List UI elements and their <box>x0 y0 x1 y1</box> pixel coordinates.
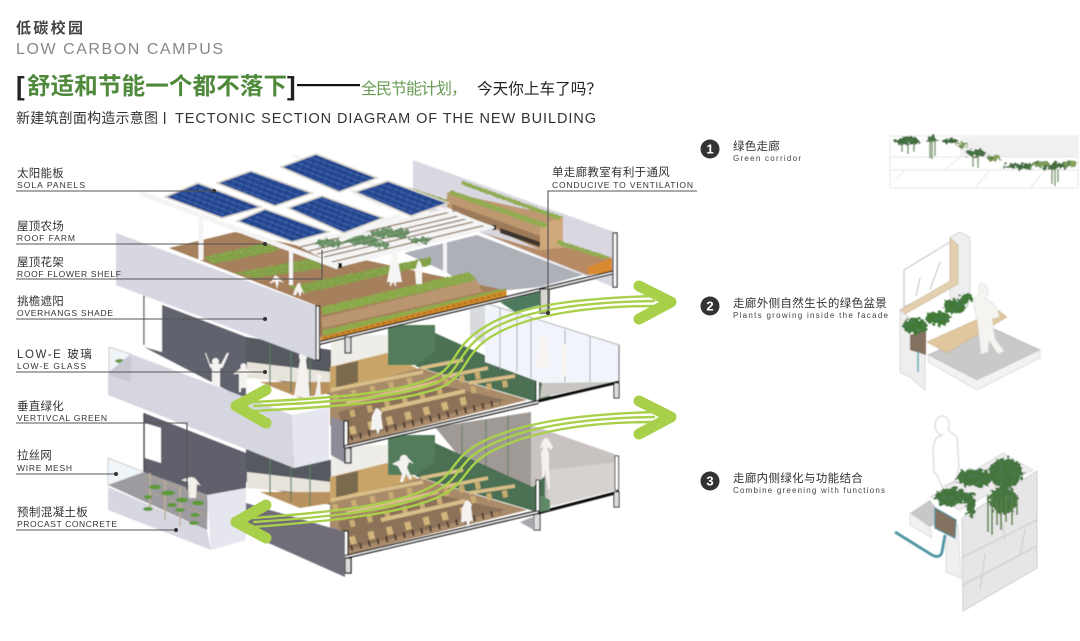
callout: solar panels <box>16 166 216 193</box>
mid balcony parapet <box>108 354 329 468</box>
callout: conducive to ventilation: 单走廊教室有利于通风 <box>552 165 670 179</box>
illustration: inner planter with seat <box>895 416 1037 611</box>
item 3: combine greening with functions <box>700 471 885 495</box>
lower dark wall <box>246 503 345 577</box>
callout: overhangs shade: OVERHANGS SHADE <box>17 308 113 318</box>
ventilation arrow: upper floor <box>236 286 671 423</box>
item 3: combine greening with functions: 3 <box>706 474 714 488</box>
roof floor slab section <box>319 233 617 353</box>
subheading: tectonic section diagram <box>16 110 596 127</box>
roof paving <box>404 235 583 293</box>
headline: comfort and energy saving: [ <box>16 71 25 101</box>
callout: conducive to ventilation: CONDUCIVE TO VENTILATION <box>552 180 693 190</box>
roof wood planter right <box>403 181 612 275</box>
callout: vertical green: VERTIVCAL GREEN <box>17 413 107 423</box>
illustration: outer planter with bench <box>900 232 1040 390</box>
item 2: plants growing inside the facade: Plants growing inside the facade <box>733 311 889 320</box>
callout: wire mesh <box>16 448 118 476</box>
callout: roof flower shelf <box>16 250 322 279</box>
lower balcony with wire mesh and planting <box>108 458 246 550</box>
callout: wire mesh: 拉丝网 <box>17 448 52 462</box>
callout: vertical green <box>16 399 187 490</box>
title: low carbon campus: 低碳校园 <box>16 19 83 37</box>
item 1: green corridor: 绿色走廊 <box>733 139 780 153</box>
roof back wall <box>413 160 617 287</box>
headline: comfort and energy saving: 全民节能计划， <box>361 80 467 98</box>
item 3: combine greening with functions: 走廊内侧绿化与功能结合 <box>733 471 863 485</box>
item 2: plants growing inside the facade: 走廊外侧自然生长的绿色盆景 <box>733 296 887 310</box>
callout: low-e glass: LOW-E GLASS <box>17 361 86 371</box>
callout: conducive to ventilation <box>546 165 697 315</box>
callout: vertical green: 垂直绿化 <box>17 399 64 413</box>
overhang wall <box>116 233 320 360</box>
callout: roof flower shelf: ROOF FLOWER SHELF <box>17 269 121 279</box>
upper floor slab and classroom <box>246 325 550 463</box>
item 3: combine greening with functions: Combine greening with functions <box>733 486 885 495</box>
roof figures <box>269 250 423 297</box>
callout: precast concrete <box>16 505 178 532</box>
ventilation arrow: lower floor <box>236 401 671 538</box>
panel support frame <box>140 155 494 285</box>
upper right corridor with glazing <box>470 300 619 401</box>
illustration: green corridor strip <box>890 136 1078 188</box>
callout: solar panels: 太阳能板 <box>17 166 64 180</box>
people on mid balcony <box>205 350 322 398</box>
item 1: green corridor <box>700 139 801 163</box>
item 1: green corridor: 1 <box>706 142 714 156</box>
callout: precast concrete: PROCAST CONCRETE <box>17 519 117 529</box>
lower classroom <box>246 435 550 573</box>
callout: overhangs shade <box>16 294 267 321</box>
subheading: tectonic section diagram: 新建筑剖面构造示意图 <box>16 110 158 126</box>
running figure and child <box>371 407 475 527</box>
title: low carbon campus <box>16 19 223 58</box>
subheading: tectonic section diagram: TECTONIC SECTION DIAGRAM OF THE NEW BUILDING <box>175 111 596 127</box>
headline: comfort and energy saving <box>16 71 602 101</box>
callout: precast concrete: 预制混凝土板 <box>17 505 88 519</box>
callout: roof flower shelf: 屋顶花架 <box>17 256 64 269</box>
trellis and vines <box>292 208 496 268</box>
item 2: plants growing inside the facade <box>700 296 889 320</box>
callout: low-e glass <box>16 347 267 374</box>
headline: comfort and energy saving: 今天你上车了吗？ <box>477 80 602 98</box>
mid parapet and rear wall <box>109 295 246 400</box>
lower rear wall and window <box>144 413 246 510</box>
callout: low-e glass: LOW-E 玻璃 <box>17 347 92 361</box>
headline: comfort and energy saving: 舒适和节能一个都不落下 <box>27 73 287 99</box>
callout: roof farm: ROOF FARM <box>17 233 75 243</box>
person: lower corridor <box>540 438 553 489</box>
callout: wire mesh: WIRE MESH <box>17 463 72 473</box>
item 1: green corridor: Green corridor <box>733 154 801 163</box>
title: low carbon campus: LOW CARBON CAMPUS <box>16 41 223 58</box>
roof wooden planters left <box>169 232 507 341</box>
callout: roof farm <box>16 219 267 246</box>
callout: roof farm: 屋顶农场 <box>17 219 64 233</box>
callout: overhangs shade: 挑檐遮阳 <box>17 294 64 308</box>
building section axonometric <box>108 154 619 577</box>
callout: solar panels: SOLA PANELS <box>17 180 85 190</box>
solar panels <box>165 154 448 242</box>
lower right corridor <box>435 412 619 530</box>
headline: comfort and energy saving: ] <box>287 71 296 101</box>
item 2: plants growing inside the facade: 2 <box>706 298 714 314</box>
